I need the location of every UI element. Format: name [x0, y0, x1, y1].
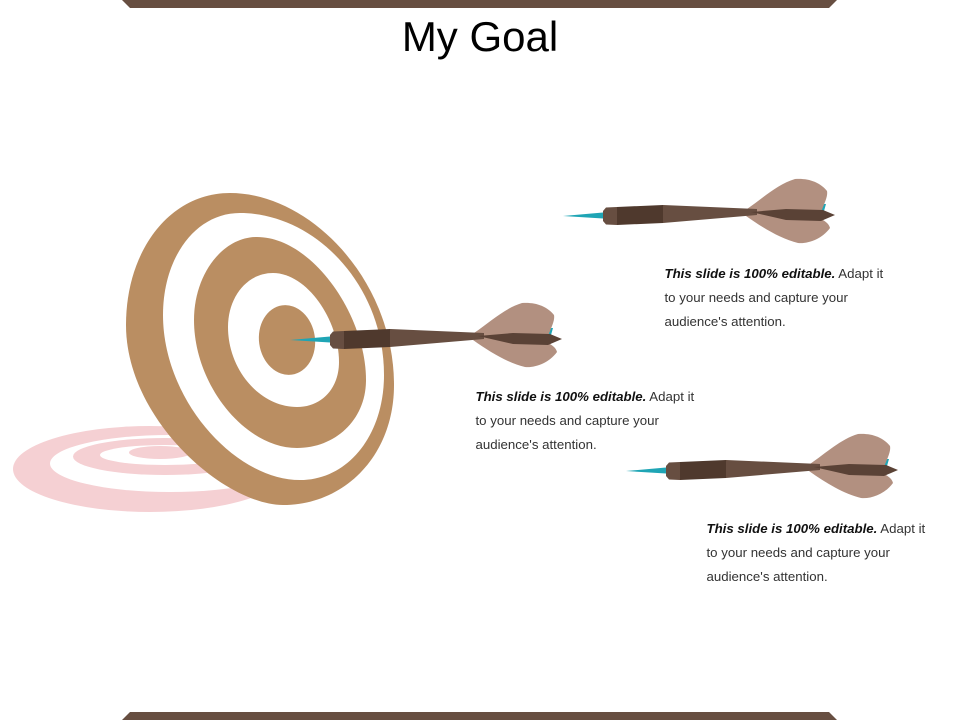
dart: upper right [563, 179, 835, 243]
text block: middle [476, 388, 694, 452]
text block: upper right [664, 266, 884, 328]
target shadow [13, 426, 290, 512]
top bar [122, 0, 837, 8]
dart: lower right [626, 434, 898, 498]
bottom bar [122, 712, 837, 720]
text block: middle: audience's attention. [476, 436, 597, 452]
target board [126, 193, 394, 505]
dart: in target [290, 303, 562, 367]
text block: lower right: audience's attention. [706, 568, 828, 584]
text block: lower right: to your needs and capture your [706, 544, 890, 560]
text block: lower right: This slide is 100% editable. Adapt it [706, 520, 925, 536]
text block: lower right [706, 520, 926, 584]
text block: middle: This slide is 100% editable. Adapt it [476, 388, 694, 404]
text block: upper right: This slide is 100% editable. Adapt it [664, 266, 883, 280]
text block: upper right: to your needs and capture your [664, 290, 848, 304]
text block: middle: to your needs and capture your [476, 412, 659, 428]
title: My Goal [402, 13, 558, 60]
text block: upper right: audience's attention. [664, 314, 786, 328]
